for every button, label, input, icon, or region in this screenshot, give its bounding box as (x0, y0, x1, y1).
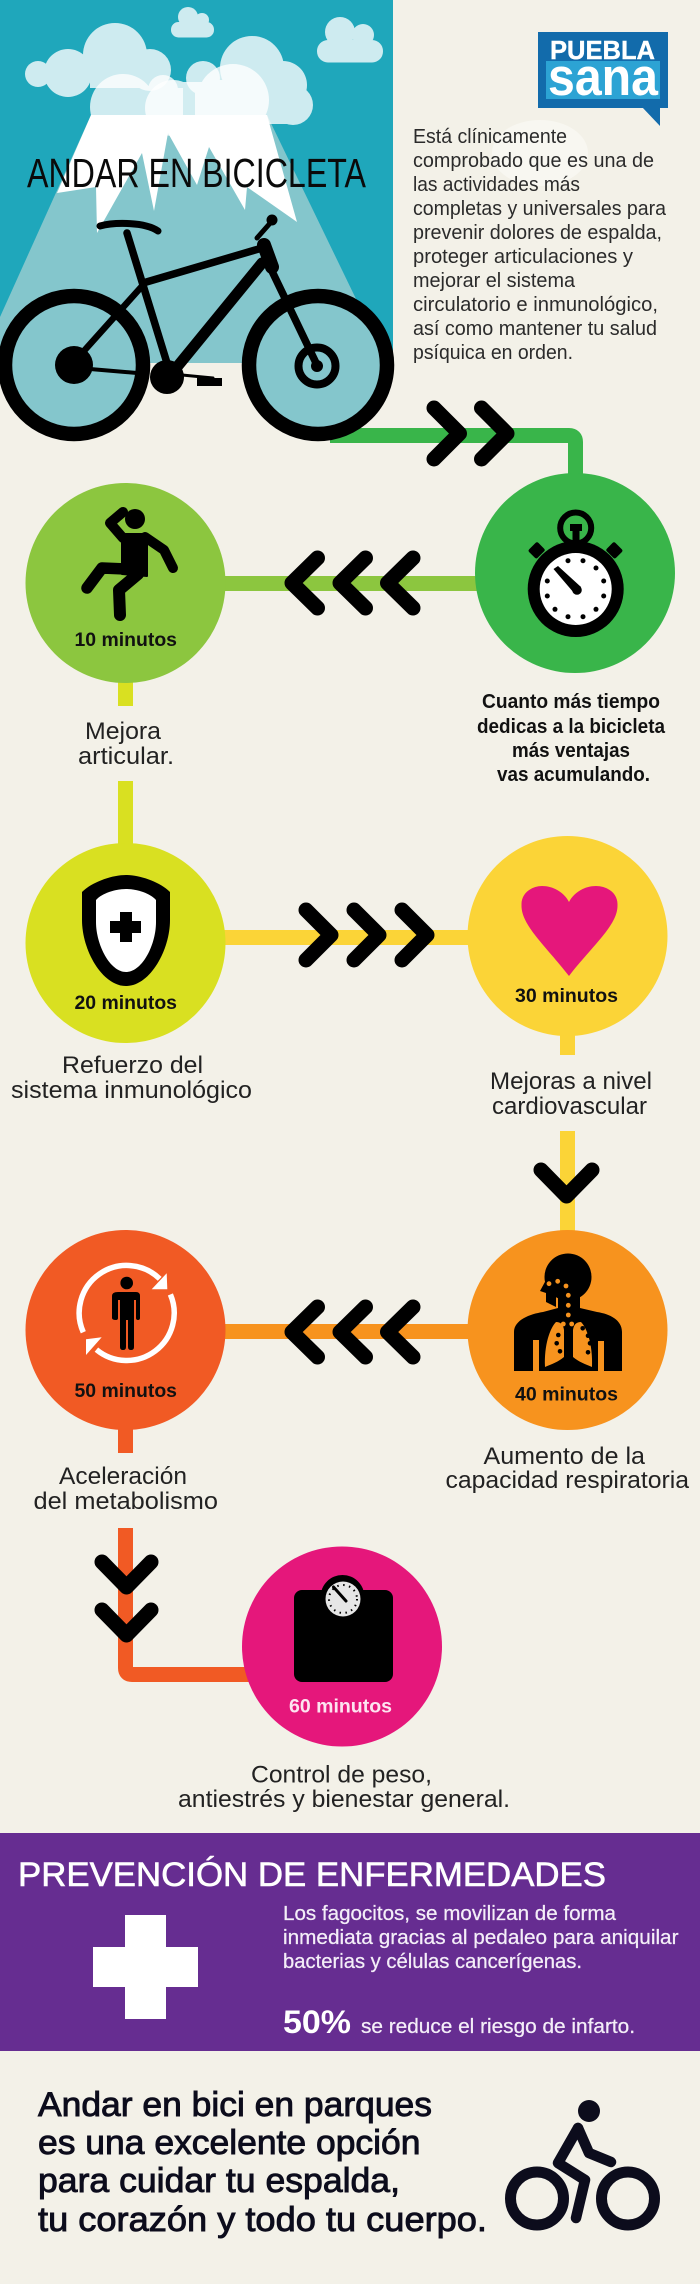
stat: 50 percent: se reduce el riesgo de infarto. (361, 2016, 635, 2038)
caption: Control de peso, (251, 1762, 432, 1788)
arrow: 40 to 50 minutes (220, 1307, 472, 1357)
connector: 30 to 40 minutes (541, 1030, 592, 1236)
arrow: start connector (330, 408, 576, 480)
text: introduction: psíquica en orden. (413, 342, 573, 364)
caption (490, 1068, 652, 1120)
logo: Puebla Sana (538, 32, 668, 126)
time label: 10 minutos (74, 630, 177, 651)
text: introduction: proteger articulaciones y (413, 246, 633, 268)
caption (78, 718, 174, 770)
circle (468, 836, 668, 1036)
text: introduction: Está clínicamente (413, 126, 567, 148)
text: phagocytes: inmediata gracias al pedaleo para aniquilar (283, 1927, 679, 1949)
logo: Puebla Sana: sana (548, 48, 658, 107)
circle (26, 843, 226, 1043)
text: phagocytes: bacterias y células cancerígenas. (283, 1951, 582, 1973)
arrow: 20 to 30 minutes (220, 910, 472, 960)
logo: Puebla Sana: PUEBLA (550, 35, 655, 65)
caption: capacidad respiratoria (446, 1467, 690, 1494)
panel: stopwatch step (475, 473, 675, 786)
time label: 50 minutos (74, 1381, 177, 1402)
text: stopwatch caption: vas acumulando. (497, 764, 650, 786)
faint cloud behind intro text (492, 120, 588, 186)
panel: 30 minutes (468, 836, 668, 1120)
caption: articular. (78, 743, 174, 770)
circle (475, 473, 675, 673)
text: introduction: así como mantener tu salud (413, 318, 657, 340)
panel: closing message (38, 2086, 654, 2239)
panel: disease prevention (0, 1833, 700, 2051)
time label: 20 minutos (74, 993, 177, 1014)
band (0, 1833, 700, 2051)
icon: shield (82, 875, 170, 986)
icon: cyclist (510, 2100, 654, 2225)
caption (178, 1762, 510, 1813)
panel: 60 minutes (178, 1546, 510, 1813)
heading: PREVENCIÓN DE ENFERMEDADES (18, 1856, 606, 1894)
caption: Mejoras a nivel (490, 1068, 652, 1095)
icon: stopwatch (528, 512, 624, 637)
text: stopwatch caption (477, 691, 666, 786)
snow cap (57, 115, 297, 233)
caption: Mejora (85, 718, 162, 745)
text: introduction (413, 126, 667, 364)
caption: Aumento de la (484, 1443, 646, 1470)
arrow: stopwatch to 10 minutes (220, 558, 480, 608)
text: introduction: prevenir dolores de espalda, (413, 222, 662, 244)
time label: 40 minutos (515, 1384, 618, 1406)
panel: 40 minutes (446, 1230, 690, 1494)
connector: 10 to 20 minutes (118, 678, 133, 851)
circle (468, 1230, 668, 1430)
text: stopwatch caption: más ventajas (512, 740, 630, 762)
caption (446, 1443, 690, 1494)
text: introduction: circulatorio e inmunológico, (413, 294, 658, 316)
text: introduction: completas y universales para (413, 198, 667, 220)
icon: heart (521, 886, 618, 976)
circle (26, 1230, 226, 1430)
text: phagocytes: Los fagocitos, se movilizan de forma (283, 1903, 617, 1925)
time label: 60 minutos (289, 1696, 392, 1718)
caption (34, 1463, 218, 1515)
time label: 30 minutos (515, 986, 618, 1007)
closing text: tu corazón y todo tu cuerpo. (38, 2201, 487, 2239)
caption (11, 1052, 252, 1104)
panel: header illustration (0, 0, 393, 363)
icon: medical cross (93, 1915, 198, 2019)
mountain (0, 115, 387, 363)
panel: 10 minutes (26, 483, 226, 770)
closing text (38, 2086, 487, 2239)
icon: weighing scale (294, 1575, 393, 1682)
icon: stretching figure (87, 509, 173, 615)
caption: Aceleración (59, 1463, 187, 1490)
stat: 50 percent (283, 2004, 635, 2040)
text: introduction: las actividades más (413, 174, 580, 196)
title: ANDAR EN BICICLETA (27, 150, 367, 196)
icon: lungs figure (514, 1254, 622, 1371)
circle (26, 483, 226, 683)
text: stopwatch caption: dedicas a la bicicleta (477, 716, 666, 738)
panel: 50 minutes (26, 1230, 226, 1515)
panel: 20 minutes (11, 843, 252, 1104)
clouds (25, 7, 383, 140)
closing text: para cuidar tu espalda, (38, 2162, 400, 2200)
icon: bicycle (5, 214, 387, 434)
caption: Refuerzo del (62, 1052, 203, 1079)
text: introduction: mejorar el sistema (413, 270, 576, 292)
caption: antiestrés y bienestar general. (178, 1786, 510, 1813)
circle (242, 1546, 442, 1746)
stat: 50 percent: 50% (283, 2004, 351, 2040)
text: stopwatch caption: Cuanto más tiempo (482, 691, 660, 713)
connector: 50 to 60 minutes (102, 1425, 250, 1674)
icon: person with cycle arrows (79, 1265, 174, 1361)
sky (0, 0, 393, 363)
caption: cardiovascular (492, 1093, 647, 1120)
text: phagocytes (283, 1903, 679, 1973)
caption: del metabolismo (34, 1488, 218, 1515)
closing text: es una excelente opción (38, 2124, 421, 2162)
closing text: Andar en bici en parques (38, 2086, 432, 2124)
caption: sistema inmunológico (11, 1077, 252, 1104)
text: introduction: comprobado que es una de (413, 150, 654, 172)
